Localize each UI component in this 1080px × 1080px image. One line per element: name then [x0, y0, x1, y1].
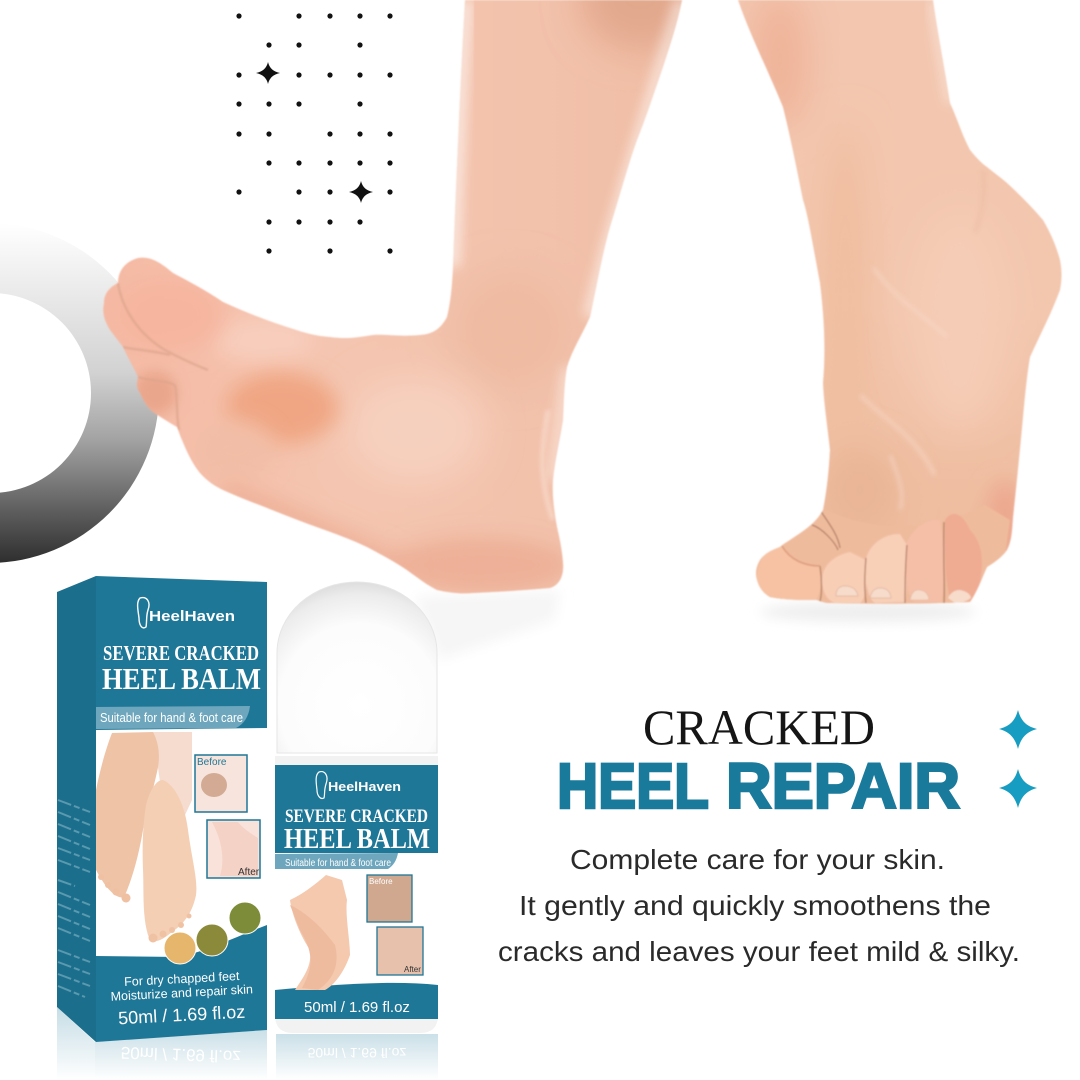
dot grid with stars [236, 13, 393, 254]
box lower text: 50ml / 1.69 fl.oz [118, 1002, 246, 1028]
icon: sparkle top [999, 710, 1037, 749]
box product name [102, 641, 261, 696]
box suitable band [96, 706, 250, 729]
floor shadows under feet [415, 590, 976, 660]
right foot [730, 0, 1075, 610]
bottle body [275, 756, 438, 1033]
box side panel [57, 576, 96, 1042]
box soles photo [96, 732, 196, 942]
icon: sparkle bottom [999, 769, 1037, 808]
reflection of box [57, 1007, 267, 1080]
bottle [275, 582, 438, 1033]
reflection of box: 50ml / 1.69 fl.oz [121, 1043, 241, 1066]
bottle suitable band: Suitable for hand & foot care [285, 858, 391, 869]
box after image: After [238, 867, 260, 878]
bottle before image: Before [369, 877, 393, 886]
left foot [90, 0, 700, 610]
title: heel repair [557, 750, 960, 822]
bottle after image [377, 927, 423, 975]
bottle hands photo [290, 875, 350, 990]
bottle cap [277, 582, 437, 753]
title: cracked: CRACKED [643, 699, 875, 755]
bottle before image [367, 875, 412, 922]
box brand logo: HeelHaven [149, 608, 235, 625]
box before image: Before [197, 757, 227, 768]
box after image [207, 820, 260, 878]
body text: It gently and quickly smoothens the [519, 890, 991, 921]
bottle suitable band [275, 853, 398, 869]
box front panel [96, 576, 267, 1042]
box product name: SEVERE CRACKED [103, 641, 259, 665]
box photo panel [96, 728, 267, 957]
bottle product name [284, 806, 430, 855]
box ingredient circles [164, 902, 261, 964]
title: heel repair: HEEL [557, 750, 709, 822]
body text: cracks and leaves your feet mild & silky. [498, 936, 1020, 967]
reflection of bottle [276, 1034, 438, 1080]
bottle volume: 50ml / 1.69 fl.oz [304, 999, 410, 1016]
box suitable band: Suitable for hand & foot care [100, 711, 243, 725]
box product name: HEEL BALM [102, 661, 261, 696]
bottle brand logo [316, 772, 401, 798]
bottle brand logo: HeelHaven [328, 779, 401, 794]
box lower text: Moisturize and repair skin [110, 982, 253, 1004]
gradient ring [0, 223, 159, 563]
box lower text [110, 969, 253, 1028]
product box [57, 576, 267, 1042]
bottle after image: After [404, 965, 421, 974]
reflection of bottle: 50ml / 1.69 fl.oz [308, 1045, 406, 1061]
title: heel repair: REPAIR [726, 750, 960, 822]
toes [757, 505, 1010, 604]
body text: Complete care for your skin. [570, 844, 945, 875]
bottle label [275, 765, 438, 1019]
box before image [195, 755, 247, 812]
bottle product name: SEVERE CRACKED [285, 806, 428, 827]
box brand logo [138, 598, 235, 628]
box lower text: For dry chapped feet [124, 969, 240, 989]
body text [498, 844, 1020, 967]
bottle product name: HEEL BALM [284, 824, 430, 855]
